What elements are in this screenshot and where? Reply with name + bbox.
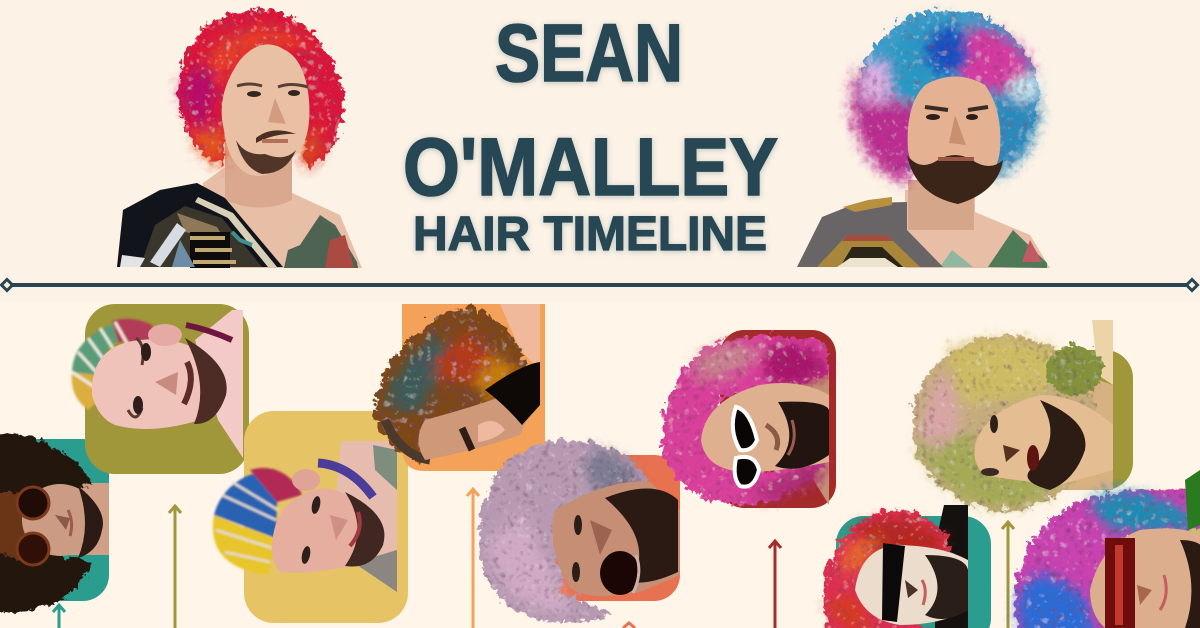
panel: olive card 2: [1030, 350, 1133, 490]
arrow: olive 2: [1002, 522, 1014, 628]
title: [403, 8, 778, 261]
subtitle: Hair Timeline: HAIR TIMELINE: [413, 208, 767, 261]
header background: [0, 0, 1200, 303]
panel: teal card 1: [10, 439, 109, 601]
head: magenta hair white sunglasses: [659, 333, 829, 505]
portrait: blue and pink afro with belt: [797, 7, 1050, 268]
cornrow hair band: [72, 319, 152, 410]
panel: dark red card: [720, 330, 836, 508]
arrow: coral: [623, 623, 635, 628]
head: pastel rainbow afro: [910, 320, 1113, 508]
head: blue and pink afro with red visor: [1012, 470, 1200, 628]
panel: coral card: [520, 455, 680, 601]
divider line with diamond ends: [2, 280, 1198, 290]
panel: teal card 2: [836, 516, 991, 628]
green leaves at edge: [1185, 470, 1200, 530]
head: lilac curls screaming: [476, 437, 680, 619]
arrow: olive 1: [169, 506, 181, 628]
arrow: orange: [467, 489, 479, 628]
title line: O'Malley: O'MALLEY: [403, 122, 778, 213]
portrait: red curly hair with belt: [117, 7, 362, 268]
head: rainbow curls: [372, 304, 540, 460]
head: red and pink afro black visor: [819, 505, 968, 628]
green hair clump: [1044, 342, 1100, 392]
panel: yellow card 2: [1130, 490, 1200, 628]
title line: Sean: SEAN: [495, 8, 683, 99]
head: dark curls with round sunglasses: [0, 431, 109, 610]
panel: yellow card 1: [244, 411, 408, 623]
panel: orange card: [402, 304, 545, 471]
head: multicolour cornrows: [72, 310, 243, 458]
cornrow hair band: [213, 468, 302, 575]
panel: olive card 1: [85, 304, 249, 474]
arrow: dark red: [769, 541, 781, 628]
head: blue and yellow cornrows: [213, 441, 397, 592]
arrow: teal: [53, 605, 65, 628]
